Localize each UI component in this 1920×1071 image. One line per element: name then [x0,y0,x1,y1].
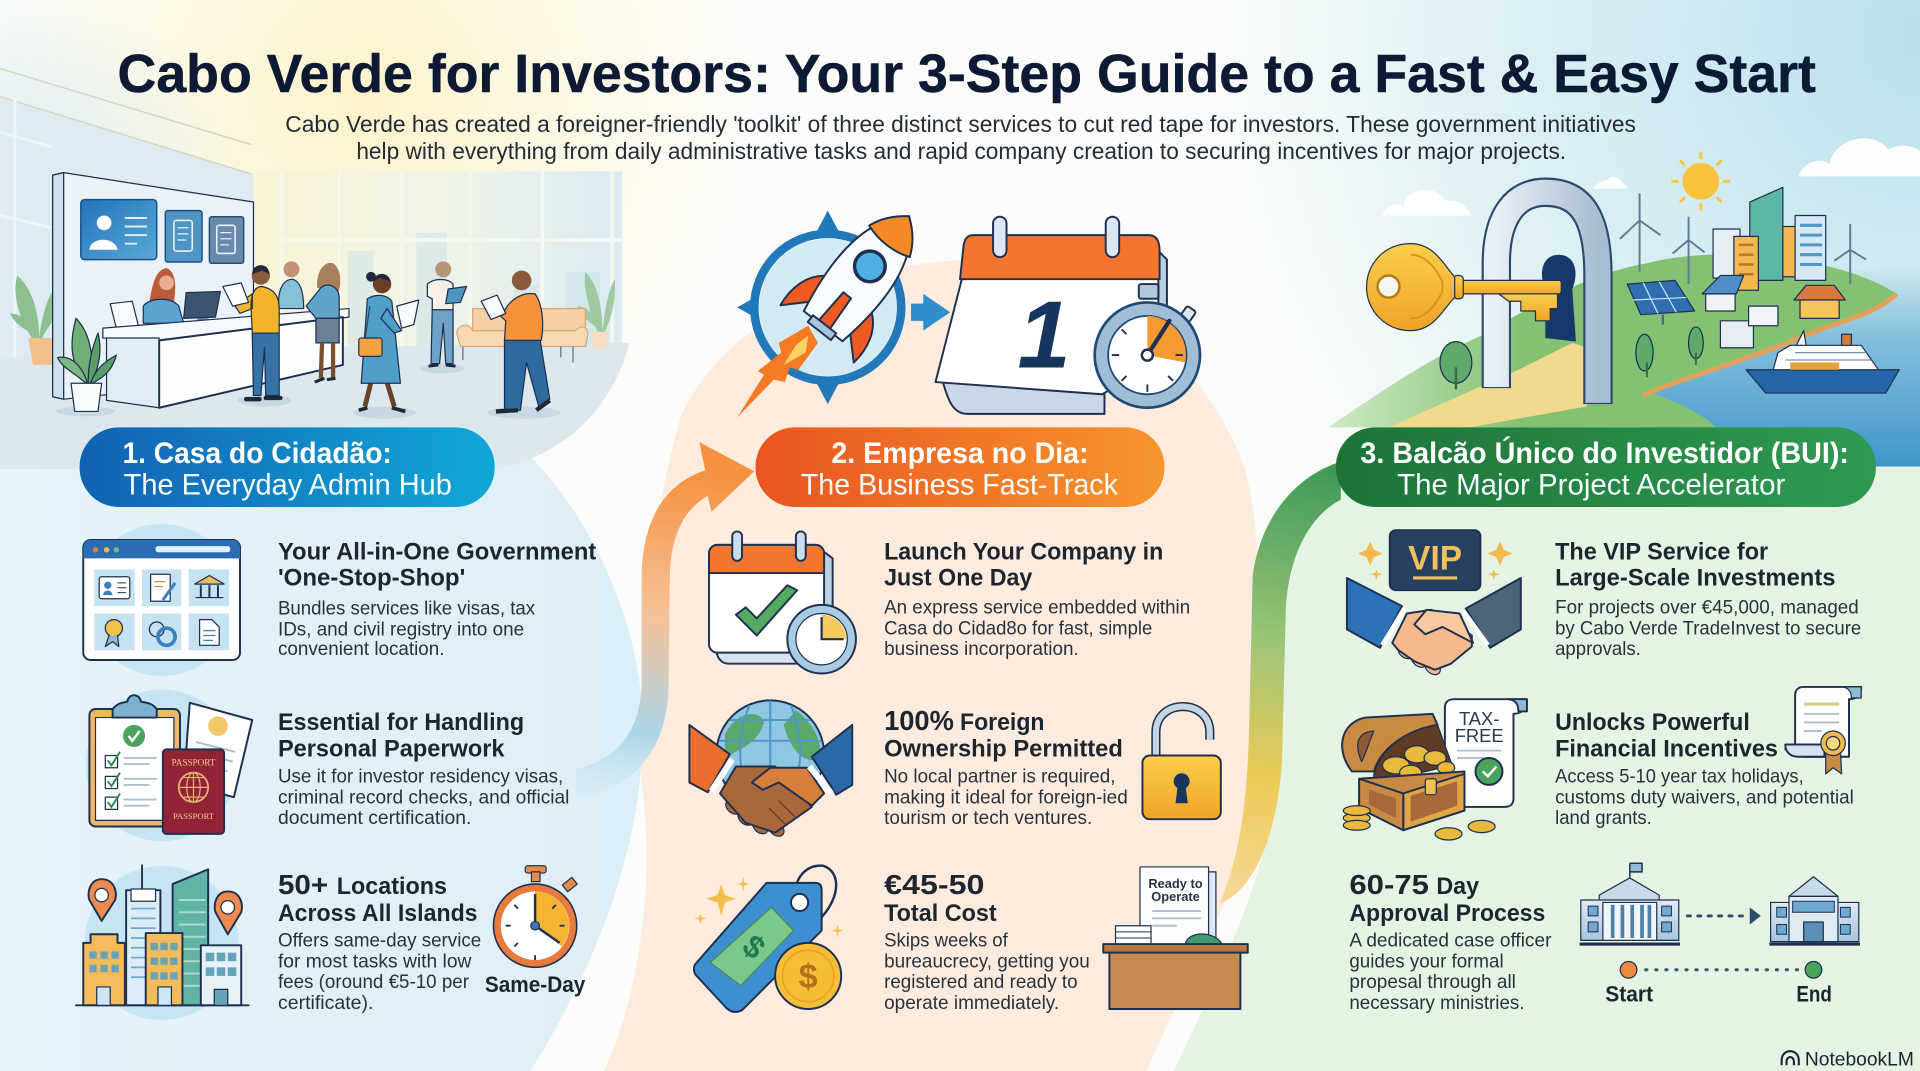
text: total cost: Total Cost [884,900,997,927]
icon: treasure chest and tax-free scroll: FREE [1455,725,1504,746]
icon: calendar with check [709,531,856,673]
text: financial incentives [1555,709,1854,829]
icon: clipboard and passport: PASSPORT [171,757,216,767]
label: same-day: Same-Day [485,972,586,997]
text: total cost [884,869,1090,1014]
subtitle [285,111,1636,164]
step 1 banner: 1. Casa do Cidadão: [122,437,392,470]
text: launch in one day [884,539,1190,660]
left windows and ceiling [0,69,253,367]
icon: service portal window [83,524,240,676]
back right plant [577,272,615,349]
calendar header [960,235,1160,279]
text: one-stop-shop: 'One-Stop-Shop' [278,564,465,591]
rocket [780,187,946,363]
text: vip service: by Cabo Verde TradeInvest to secure [1555,618,1861,639]
subtitle: Cabo Verde has created a foreigner-friendly 'toolkit' of three distinct services to cut red tape for investors. These government initiatives [285,111,1636,137]
screen: document [165,211,202,262]
village houses [1702,276,1845,348]
icon: city with location pins [76,864,249,1020]
text: total cost: €45-50 [884,869,984,900]
text: approval process: necessary ministries. [1349,993,1524,1014]
side edge [1158,251,1167,355]
timeline: start to end [1605,961,1832,1007]
person behind the desk [279,261,304,309]
text: personal paperwork: Use it for investor residency visas, [278,766,563,787]
icon: clipboard and passport: PASSPORT [173,811,215,821]
illustration: key, arch and island [1329,138,1920,467]
text: locations [278,869,481,1014]
text: total cost: operate immediately. [884,993,1059,1014]
arch [1496,192,1598,404]
icon: same-day stopwatch [493,866,577,967]
step 2 banner [756,427,1164,507]
sand path [1389,343,1587,427]
title: Cabo Verde for Investors: Your 3-Step Guide to a Fast & Easy Start [118,44,1816,104]
icon: desk with ready to operate paper: Operate [1151,889,1200,904]
icon: clipboard and passport [86,689,252,841]
text: approval process: A dedicated case officer [1349,931,1551,952]
wind turbines [1620,193,1866,284]
woman at desk [306,263,340,382]
text: vip service: The VIP Service for [1555,539,1769,566]
text: one-stop-shop: Bundles services like visas, tax [278,599,536,620]
cruise ship [1746,331,1899,393]
text: financial incentives: Financial Incentives [1555,736,1778,763]
text: foreign ownership: making it ideal for foreign-ied [884,787,1128,808]
stopwatch [1095,284,1200,408]
screen: person [81,200,157,260]
text: vip service: approvals. [1555,639,1641,660]
text: foreign ownership: Foreign [960,709,1044,736]
front plant [58,318,116,411]
text: vip service: For projects over €45,000, managed [1555,597,1859,618]
timeline: start to end: End [1796,982,1832,1007]
text: foreign ownership: 100% [884,705,954,736]
arrow to calendar [911,294,950,331]
text: one-stop-shop: convenient location. [278,639,444,660]
day number: 1 [1018,282,1071,388]
icon: certificate scroll [1785,687,1861,774]
text: total cost: bureaucrecy, getting you [884,951,1090,972]
text: launch in one day: An express service embedded within [884,597,1190,618]
page stack [943,382,1104,414]
waiting sofa [457,309,588,362]
icon: vip handshake: VIP [1408,539,1462,577]
text: approval process: 60-75 [1349,869,1429,900]
man in white shirt with tablet [427,261,467,366]
man in yellow sweater [223,265,280,399]
text: foreign ownership [884,705,1128,829]
text: locations: certificate). [278,993,373,1014]
illustration: one-day calendar with stopwatch [936,217,1200,414]
logo: NotebookLM: NotebookLM [1805,1049,1914,1070]
text: launch in one day: business incorporation. [884,639,1079,660]
clouds [1382,138,1920,216]
text: personal paperwork: document certification. [278,808,471,829]
text: vip service: Large-Scale Investments [1555,564,1836,591]
text: total cost: registered and ready to [884,972,1078,993]
timeline: start to end: Start [1605,982,1654,1007]
woman with orange bag [359,272,419,411]
icon: desk with ready to operate paper: Ready to [1148,876,1203,891]
wall with screens [53,173,253,399]
floor [0,343,629,469]
text: personal paperwork [278,709,569,829]
back left plant [10,276,53,365]
binder rings [993,217,1119,257]
icon: end ministry building [1769,877,1860,944]
golden key [1367,244,1561,331]
text: foreign ownership: No local partner is required, [884,766,1116,787]
text: approval process [1349,869,1551,1014]
text: financial incentives: Access 5-10 year tax holidays, [1555,766,1804,787]
city buildings [1713,187,1826,290]
flame [737,326,818,418]
text: personal paperwork: Essential for Handling [278,709,524,736]
sun [1671,152,1730,211]
text: financial incentives: land grants. [1555,808,1652,829]
text: locations: 50+ [278,869,328,900]
text: locations: Across All Islands [278,900,478,927]
text: one-stop-shop: IDs, and civil registry into one [278,620,524,641]
step 3 banner: 3. Balcão Único do Investidor (BUI): [1360,436,1849,470]
coast line [1643,294,1897,396]
text: personal paperwork: criminal record checks, and official [278,787,569,808]
text: launch in one day: Just One Day [884,564,1033,591]
illustration: rocket launch [737,187,950,418]
step 2 banner: 2. Empresa no Dia: [831,437,1089,470]
text: foreign ownership: tourism or tech ventures. [884,808,1092,829]
text: one-stop-shop [278,539,596,660]
receptionist [143,268,184,323]
step 3 banner: The Major Project Accelerator [1397,469,1786,502]
panel: centre peach area [604,260,1259,1071]
icon: open padlock [1142,707,1221,819]
arrow: dotted [1687,907,1761,924]
step 1 banner [80,427,495,507]
text: locations: for most tasks with low [278,951,472,972]
text: approval process: Approval Process [1349,900,1545,927]
text: personal paperwork: Personal Paperwork [278,736,505,763]
back windows [253,171,622,355]
ribbon arrow: green to yellow [1220,462,1341,904]
text: one-stop-shop: Your All-in-One Government [278,539,596,566]
text: launch in one day: Casa do Cidad8o for fast, simple [884,618,1152,639]
step 1 banner: The Everyday Admin Hub [124,469,452,502]
subtitle: help with everything from daily administrative tasks and rapid company creation to securing incentives for major projects. [356,138,1566,164]
floor shadows [56,364,561,419]
text: financial incentives: customs duty waivers, and potential [1555,787,1854,808]
icon: price tag with coin: $ [799,958,818,996]
step 3 banner [1336,427,1876,507]
icon: treasure chest and tax-free scroll: TAX- [1459,708,1499,729]
icon: price tag with coin [694,866,844,1012]
keyhole [1542,255,1576,342]
text: foreign ownership: Ownership Permitted [884,736,1123,763]
icon: desk with ready to operate paper [1103,867,1248,1009]
compass ring [737,211,901,404]
icon: vip handshake [1347,530,1521,678]
text: vip service [1555,539,1861,660]
panel: left blue area [0,453,643,1071]
text: locations: Offers same-day service [278,931,481,952]
man in orange sweater [481,271,550,411]
text: launch in one day: Launch Your Company in [884,539,1163,566]
text: approval process: guides your formal [1349,951,1504,972]
text: total cost: Skips weeks of [884,931,1008,952]
text: locations: fees (oround €5-10 per [278,972,469,993]
sea [1641,267,1920,467]
text: financial incentives: Unlocks Powerful [1555,709,1750,736]
reception desk [103,309,349,408]
calendar page [936,277,1161,394]
text: approval process: propesal through all [1349,972,1516,993]
icon: price tag with coin: $ [736,927,773,966]
illustration: government office scene [0,69,629,469]
step 2 banner: The Business Fast-Track [801,469,1118,502]
screen: form [209,217,244,263]
solar panel [1627,280,1695,324]
text: approval process: Day [1436,873,1480,900]
icon: start government building [1580,863,1680,944]
ribbon arrow: blue to orange [576,442,754,798]
panel: right green area [1173,456,1920,1071]
text: locations: Locations [337,873,447,900]
island land [1329,254,1897,427]
icon: globe and handshake [689,700,852,839]
trees [1440,327,1703,389]
icon: treasure chest and tax-free scroll [1342,699,1527,840]
monitor [184,291,220,324]
paper stand [110,301,138,328]
